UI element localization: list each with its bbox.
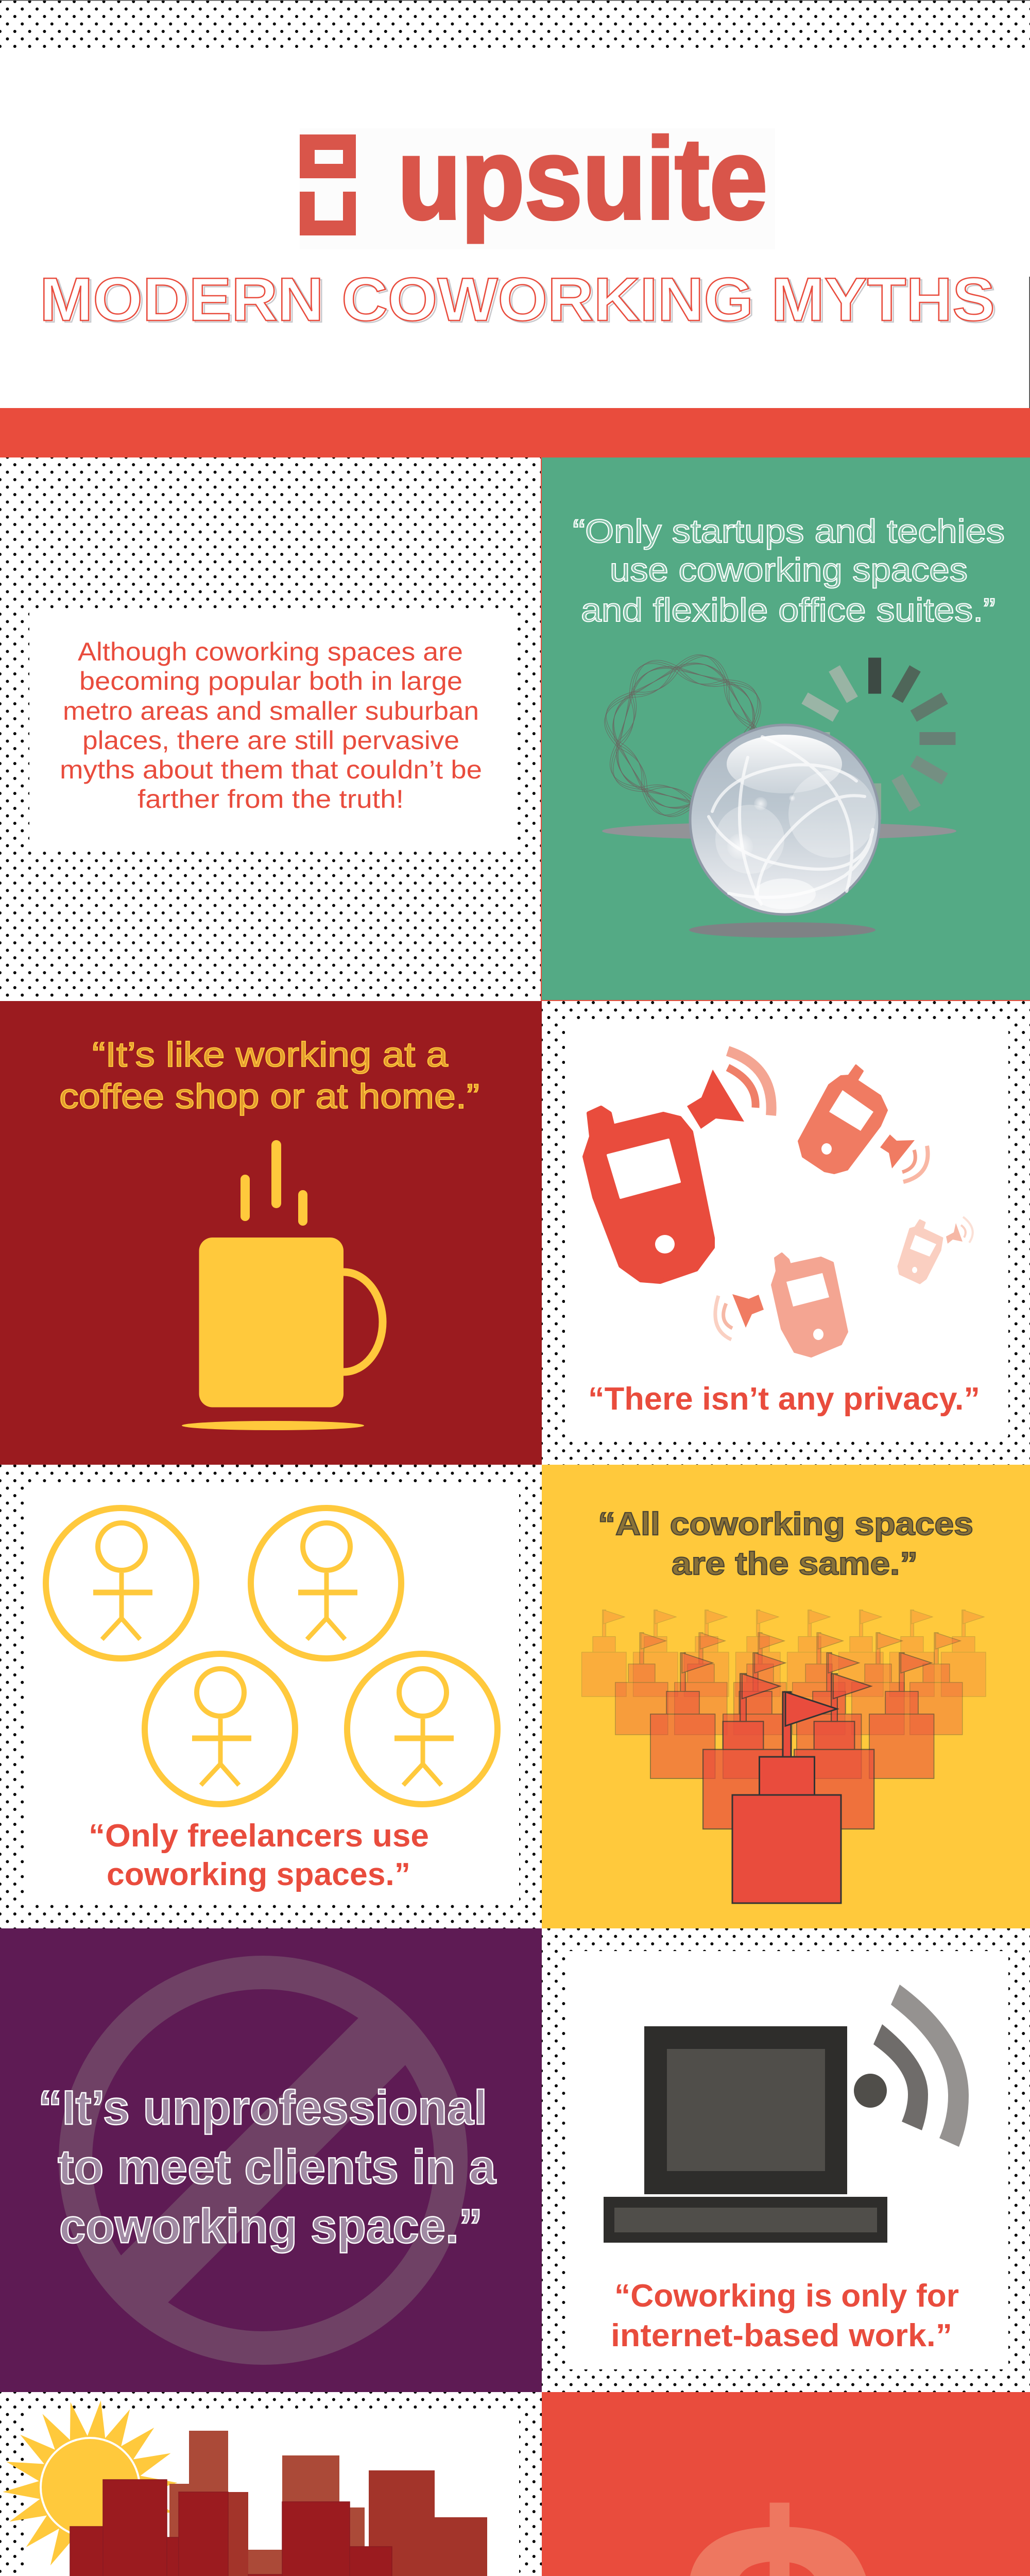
intro text: becoming popular both in large — [79, 667, 462, 696]
myth quote: “Coworking is only for — [614, 2278, 959, 2314]
myth quote: use coworking spaces — [610, 551, 968, 588]
icon: twisted ribbon ring — [543, 593, 828, 878]
icon: computer with wifi signal — [604, 1985, 969, 2243]
myth quote — [89, 1818, 429, 1892]
panel: myth internet work — [542, 1928, 1030, 2392]
panel: intro — [0, 457, 542, 1001]
myth quote: coworking space.” — [59, 2199, 483, 2253]
shadow behind globe — [602, 822, 956, 840]
icon: phone tiny — [898, 1217, 973, 1283]
icon: four people in circles — [46, 1508, 497, 1804]
icon: phone medium — [799, 1065, 928, 1182]
intro text: places, there are still pervasive — [82, 726, 459, 755]
myth quote: coffee shop or at home.” — [59, 1077, 479, 1116]
intro text: farther from the truth! — [138, 785, 404, 814]
icon: city skyline — [25, 2431, 516, 2576]
myth quote — [598, 1506, 973, 1582]
panel: myth privacy — [542, 1000, 1030, 1465]
intro text — [60, 637, 482, 814]
myth quote: to meet clients in a — [58, 2140, 496, 2194]
icon: logo squares — [300, 134, 356, 235]
icon: steaming mug — [182, 1140, 383, 1430]
myth quote — [573, 513, 1005, 629]
panel: myth coffee shop — [0, 1001, 542, 1465]
myth quote: “All coworking spaces — [598, 1506, 973, 1542]
icon: loading spinner — [794, 657, 956, 819]
logo wordmark: upsuite — [398, 114, 767, 243]
icon: sun — [2, 2399, 178, 2575]
red divider band — [0, 408, 1030, 457]
intro text: metro areas and smaller suburban — [63, 697, 479, 725]
panel: myth expensive — [542, 2392, 1030, 2576]
title: MODERN COWORKING MYTHS — [40, 265, 995, 334]
myth quote: are the same.” — [672, 1546, 918, 1582]
myth quote — [611, 2278, 959, 2353]
myth quote — [59, 1035, 479, 1116]
panel: myth freelancers — [0, 1465, 542, 1928]
myth quote: coworking spaces.” — [107, 1857, 410, 1892]
panel: myth startups and techies — [542, 457, 1030, 1001]
panel: myth all the same — [542, 1465, 1030, 1928]
intro text: Although coworking spaces are — [78, 637, 463, 666]
myth quote: “Only startups and techies — [573, 513, 1005, 550]
panel: myth unprofessional — [0, 1928, 542, 2392]
icon: repeating flag towers — [582, 1610, 986, 1903]
myth quote: “There isn’t any privacy.” — [588, 1381, 980, 1417]
icon: phone small — [715, 1253, 847, 1357]
title: MODERN COWORKING MYTHS — [42, 267, 997, 335]
icon: glass globe — [690, 725, 880, 914]
myth quote: “Only freelancers use — [89, 1818, 429, 1854]
intro text: myths about them that couldn’t be — [60, 755, 482, 784]
icon: prohibition sign — [75, 1972, 451, 2348]
myth quote — [38, 2080, 496, 2253]
icon: phone large — [585, 1051, 771, 1282]
myth quote: and flexible office suites.” — [581, 591, 995, 629]
myth quote: “It’s like working at a — [92, 1035, 448, 1074]
shadow below globe — [689, 922, 876, 938]
panel: myth major metros — [0, 2392, 542, 2576]
myth quote: internet-based work.” — [611, 2318, 952, 2353]
logo: upsuite — [300, 114, 775, 249]
myth quote: “It’s unprofessional — [38, 2080, 487, 2134]
